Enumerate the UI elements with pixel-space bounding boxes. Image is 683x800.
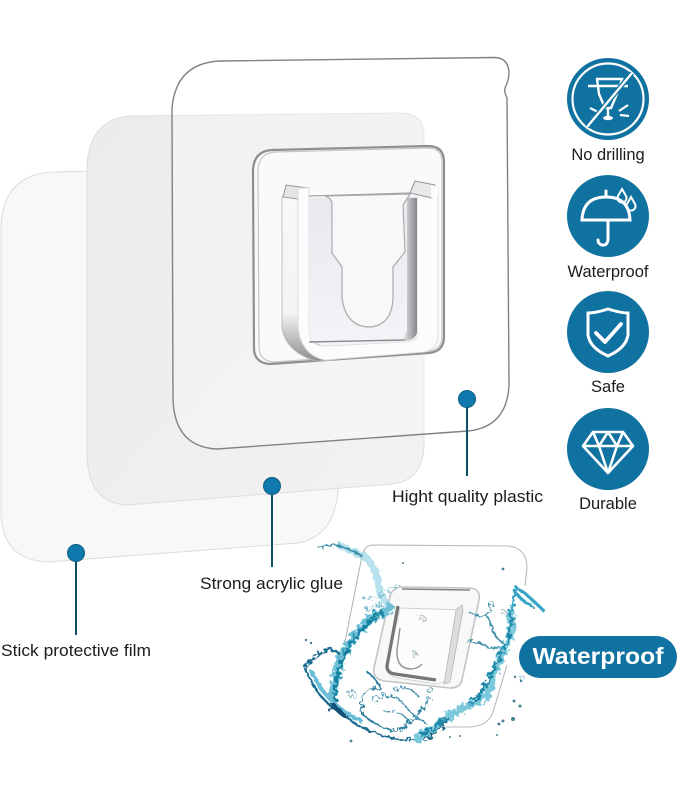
callout: strong acrylic glue <box>200 478 343 593</box>
hook <box>253 146 444 364</box>
icon badge: durable <box>567 408 649 513</box>
icon badge: no drilling <box>567 58 649 164</box>
callout: stick protective film <box>1 544 151 660</box>
label: Durable <box>579 495 637 513</box>
waterproof illustration <box>305 545 543 742</box>
label: No drilling <box>571 146 645 164</box>
waterproof pill badge <box>519 636 677 678</box>
icon badge: waterproof <box>567 175 649 281</box>
hook clip frame <box>282 181 438 361</box>
label: Safe <box>591 378 625 396</box>
panel: strong acrylic glue layer <box>87 113 424 505</box>
waterproof pill badge: Waterproof <box>532 643 664 669</box>
hook base plate <box>253 146 444 364</box>
water splash <box>305 545 543 740</box>
water droplets <box>305 562 535 742</box>
icon badge: safe <box>567 291 649 396</box>
callout: hight quality plastic <box>392 390 543 506</box>
mini adhesive panel <box>345 545 527 727</box>
callout: hight quality plastic: Hight quality plastic <box>392 488 543 506</box>
label: Waterproof <box>567 263 649 281</box>
panel: high quality plastic layer <box>172 58 509 449</box>
mini hook <box>374 587 479 688</box>
callout: stick protective film: Stick protective film <box>1 642 151 660</box>
panel: stick protective film layer <box>1 171 338 562</box>
callout: strong acrylic glue: Strong acrylic glue <box>200 575 343 593</box>
